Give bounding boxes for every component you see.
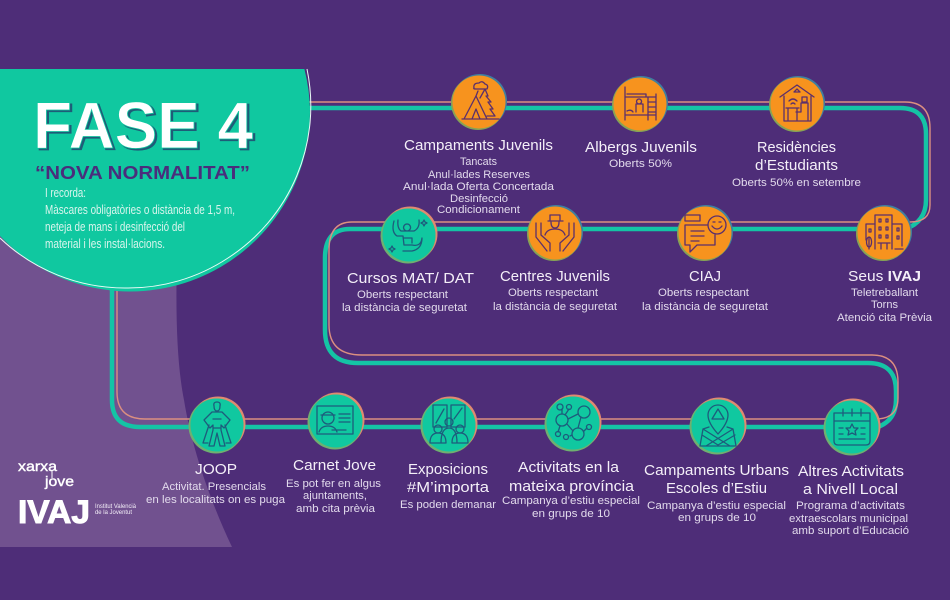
icon: tent and tree [462, 82, 499, 119]
logo: IVAJ: Institut Valencià [95, 504, 137, 510]
stage: Albergs Juvenils [585, 76, 697, 170]
icon: person celebrating [389, 220, 427, 252]
details: Atenció cita Prèvia [837, 312, 932, 324]
title: FASE 4: FASE 4 [33, 88, 253, 162]
icon: house with student [780, 85, 814, 121]
details [146, 481, 285, 506]
logo: IVAJ: de la Joventut [95, 510, 132, 516]
details: Desinfecció [450, 193, 508, 205]
heading: Centres Juvenils [500, 268, 610, 285]
details: Oberts respectant [357, 289, 448, 301]
details: Oberts respectant [658, 287, 749, 299]
title: FASE 4: FASE 4 [35, 90, 255, 164]
reminder text: I recorda: [45, 186, 86, 200]
details: Es pot fer en algus [286, 478, 382, 490]
heading: Residències [757, 139, 836, 156]
stage: Residències d'Estudiants [732, 76, 861, 189]
reminder text: Màscares obligatòries o distància de 1,5 m, [45, 203, 235, 217]
details: Torns [871, 299, 899, 311]
details: amb suport d’Educació [792, 525, 909, 537]
heading: Albergs Juvenils [585, 139, 697, 156]
icon: map pin with tent [700, 405, 736, 446]
details: Condicionament [437, 204, 520, 216]
reminder text: neteja de mans i desinfecció del [45, 220, 185, 234]
logo: IVAJ [18, 494, 137, 530]
details: Oberts 50% en setembre [732, 177, 861, 189]
icon: hands holding person [536, 215, 574, 251]
heading: mateixa província [509, 478, 635, 495]
icon: chat bubbles and smile [685, 215, 726, 252]
details [493, 287, 617, 313]
icon: gallery visitors [430, 405, 468, 443]
details: ajuntaments, [303, 490, 367, 502]
heading: Seus IVAJ [848, 268, 921, 285]
heading: #M’importa [407, 479, 490, 496]
details: la distància de seguretat [342, 302, 467, 314]
panel: teal title circle [0, 69, 311, 292]
stage: Campaments Juvenils [403, 74, 554, 216]
route line: teal path [112, 108, 926, 427]
stage: Campaments Urbans [644, 398, 789, 524]
logo: xarxa jove [18, 458, 74, 489]
heading: CIAJ [689, 268, 721, 285]
stage: CIAJ [642, 205, 768, 313]
stage: Seus IVAJ [837, 205, 932, 324]
icon: id card [317, 406, 353, 434]
details: en les localitats on es puga [146, 494, 285, 506]
details: Oberts respectant [508, 287, 598, 299]
stage: Centres Juvenils [493, 205, 617, 313]
stage: Exposicions #M'importa [400, 396, 496, 511]
heading: JOOP [195, 461, 237, 478]
details: Anul·lada Oferta Concertada [403, 181, 554, 193]
icon: superhero [203, 402, 231, 446]
details [647, 500, 786, 524]
heading: Escoles d’Estiu [666, 480, 767, 497]
details: en grups de 10 [678, 512, 756, 524]
details: Anul·lades Reserves [428, 169, 531, 181]
heading: a Nivell Local [803, 481, 898, 498]
details [789, 500, 909, 537]
logo: IVAJ: IVAJ [18, 494, 90, 530]
details: extraescolars municipal [789, 513, 908, 525]
heading: d’Estudiants [755, 157, 838, 174]
stage: Altres Activitats a Nivell Local [789, 398, 909, 537]
heading: Campaments Urbans [644, 462, 789, 479]
logo: xarxa jove: xarxa [18, 458, 57, 474]
icon: bunk bed [625, 87, 656, 120]
icon: buildings [866, 215, 903, 249]
heading: Exposicions [408, 461, 488, 478]
details [342, 289, 467, 314]
heading [509, 459, 635, 495]
details: Oberts 50% [609, 158, 672, 170]
details [502, 495, 640, 520]
stage: Carnet Jove [286, 392, 382, 515]
reminder text: material i les instal·lacions. [45, 237, 165, 251]
icon: calendar with star [834, 409, 870, 445]
details [642, 287, 768, 313]
heading: Cursos MAT/ DAT [347, 270, 474, 287]
stage: Activitats en la mateixa província [502, 394, 640, 520]
details: la distància de seguretat [642, 301, 768, 313]
details: Es poden demanar [400, 499, 496, 511]
stage: Cursos MAT/DAT [342, 206, 474, 314]
details: Teletreballant [851, 287, 918, 299]
details: Tancats [460, 156, 498, 168]
heading: Activitats en la [518, 459, 620, 476]
logo: xarxa jove: jove [44, 473, 74, 489]
details: Campanya d’estiu especial [502, 495, 640, 507]
heading [644, 462, 789, 497]
details: la distància de seguretat [493, 301, 617, 313]
details: Activitat. Presencials [162, 481, 267, 493]
reminder text [45, 186, 235, 251]
heading [755, 139, 838, 174]
heading [407, 461, 490, 496]
details: amb cita prèvia [296, 503, 375, 515]
panel: light purple side panel [0, 230, 232, 547]
details [286, 478, 382, 515]
heading: Carnet Jove [293, 457, 376, 474]
heading: Altres Activitats [798, 463, 904, 480]
stage: JOOP [146, 396, 285, 506]
route line: salmon path [117, 102, 930, 419]
details: en grups de 10 [532, 508, 610, 520]
subtitle: Nova Normalitat: “NOVA NORMALITAT” [35, 163, 250, 183]
heading: Campaments Juvenils [404, 137, 553, 154]
details [837, 287, 932, 324]
details: Programa d’activitats [796, 500, 906, 512]
details [403, 156, 554, 216]
details: Campanya d’estiu especial [647, 500, 786, 512]
heading [798, 463, 904, 498]
icon: people network [556, 404, 592, 440]
